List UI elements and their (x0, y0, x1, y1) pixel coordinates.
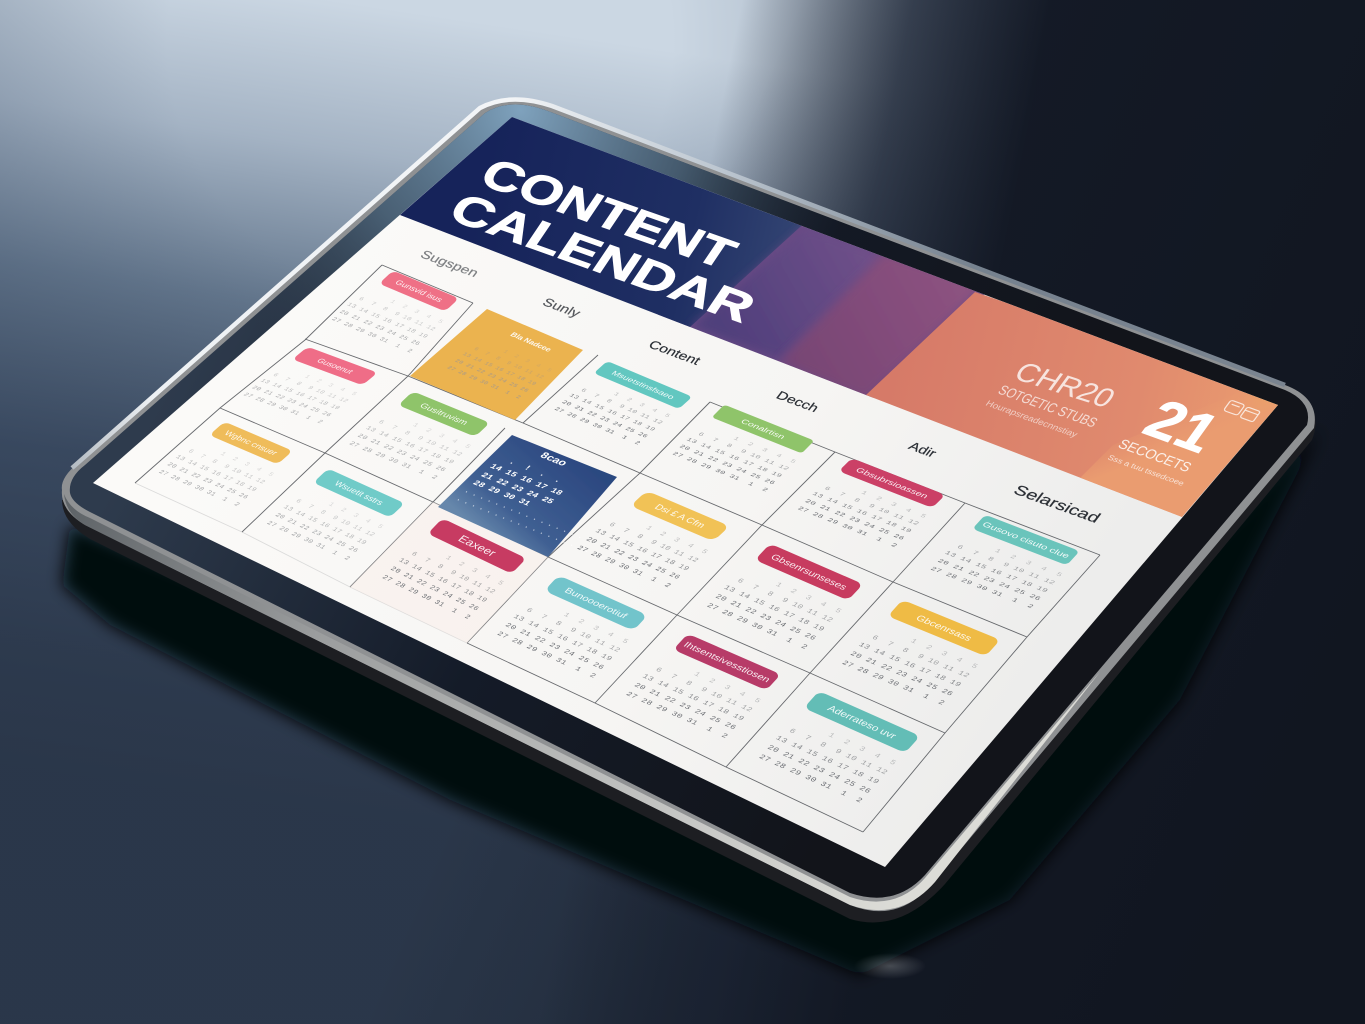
tablet (60, 90, 1320, 922)
date grid: 6 7 8 9 10 11 12 (817, 484, 920, 527)
date grid: 20 21 22 23 24 25 26 (584, 537, 682, 581)
tablet shadow on desk (62, 430, 1320, 979)
date grid: 13 14 15 16 17 18 19 (593, 528, 691, 573)
date grid: 1 2 3 4 5 (657, 656, 762, 705)
date grid: 1 2 3 4 5 (873, 624, 979, 671)
pill: green label: Gusitruvism (418, 401, 470, 427)
tablet bezel (70, 104, 1308, 898)
header light coral panel (1080, 392, 1278, 517)
date grid: 1 2 3 4 5 (583, 379, 672, 419)
pill: crimson label: Gbsubrsioassen (854, 466, 930, 500)
date grid: 6 7 8 9 10 11 12 (405, 549, 497, 596)
date grid: 27 28 29 30 31 1 2 (445, 365, 523, 400)
date grid (455, 454, 658, 563)
date grid: 13 14 15 16 17 18 19 (722, 585, 826, 633)
date grid: 27 28 29 30 31 1 2 (928, 566, 1035, 610)
date grid: 6 7 8 9 10 11 12 (730, 576, 834, 624)
panel: teal cell lower (495, 573, 652, 680)
date grid: 20 21 22 23 24 25 26 (355, 433, 447, 474)
day label 3: Content (646, 337, 704, 367)
date grid: 27 28 29 30 31 1 2 (574, 545, 672, 590)
date grid: 13 14 15 16 17 18 19 (363, 425, 456, 466)
day label 1: Sugspen (418, 247, 482, 279)
title line two: CALENDAR (441, 185, 764, 331)
panel: yellow cell left (157, 419, 298, 508)
bezel highlight (302, 104, 806, 290)
card content (445, 324, 570, 400)
pill: teal label (804, 691, 920, 753)
date grid: 13 14 15 16 17 18 19 (396, 557, 489, 604)
pill: yellow label: Dsi £ A Cfm (652, 503, 707, 530)
date grid: 20 21 22 23 24 25 26 (453, 358, 531, 394)
date grid: 1 2 3 4 5 (476, 338, 554, 373)
date grid: 20 21 22 23 24 25 26 (250, 385, 333, 418)
pill: crimson label (755, 544, 863, 600)
panel: crimson cell centre (705, 542, 866, 651)
day label 6: Selarsicad (1010, 482, 1104, 526)
tablet rim base (62, 98, 1315, 911)
screen body (93, 117, 1278, 867)
date grid: 1 2 3 4 5 (413, 540, 505, 587)
date grid: 13 14 15 16 17 18 19 (174, 454, 258, 493)
pill: yellow label (630, 491, 730, 541)
pill: pink label: Gusoenut (315, 357, 356, 375)
icon: calendar squares (1223, 400, 1261, 422)
card title: 8cao (538, 451, 570, 468)
date grid (380, 540, 505, 621)
pill: teal label: Msuetstinsfsaeo (609, 369, 677, 401)
date grid: 27 28 29 30 31 1 2 (624, 691, 729, 740)
screen (93, 100, 1290, 867)
date grid: 14 15 16 17 18 (487, 462, 565, 497)
date grid: 27 28 29 30 31 1 2 (157, 469, 241, 508)
date grid: 1 2 3 4 5 (825, 477, 928, 520)
date grid (347, 410, 472, 481)
date grid: 20 21 22 23 24 25 26 (273, 512, 360, 554)
date grid: 20 21 22 23 24 25 26 (765, 744, 873, 795)
date grid: 13 14 15 16 17 18 19 (943, 550, 1049, 595)
date grid: 27 28 29 30 31 1 2 (796, 506, 898, 549)
date grid: 6 7 8 9 10 11 12 (602, 520, 700, 564)
card title: Bla Nadcee (508, 331, 554, 354)
date grid: 6 7 8 9 10 11 12 (782, 725, 889, 777)
panel: teal cell right (928, 513, 1083, 610)
pill: crimson label: Gbsenrsunseses (768, 553, 849, 592)
pill: pink label: Gunsvid isus (393, 279, 445, 304)
header band underlay (658, 215, 984, 398)
panel: blue highlight card (438, 435, 672, 563)
card background (410, 309, 583, 420)
date grid: 27 28 29 30 31 1 2 (757, 753, 864, 805)
header purple band (690, 225, 885, 360)
date grid: 13 14 15 16 17 18 19 (640, 674, 746, 723)
pill: green label: Conalrtisn (739, 418, 787, 440)
pill: teal label: Bunoooerotiuf (562, 586, 629, 621)
panel: teal cell top (553, 361, 692, 446)
date grid: 27 28 29 30 31 1 2 (264, 520, 352, 562)
date grid: 27 28 29 30 31 1 2 (670, 451, 769, 494)
date grid: 27 28 29 30 31 1 2 (347, 441, 439, 481)
date grid: 13 14 15 16 17 18 19 (461, 351, 538, 387)
date grid: 27 28 29 30 31 1 2 (330, 316, 414, 354)
pill: green label (398, 391, 490, 437)
date grid: 20 21 22 23 24 25 26 (936, 558, 1042, 602)
date grid: 1 2 3 4 5 (298, 488, 385, 531)
date grid (242, 364, 359, 425)
date grid: 6 7 8 9 10 11 12 (468, 345, 546, 380)
date grid: 1 2 3 4 5 (698, 423, 797, 465)
date grid (928, 535, 1064, 610)
header coral panel (866, 292, 1290, 530)
date grid: 20 21 22 23 24 25 26 (560, 399, 649, 439)
tablet upper rim highlight (72, 99, 1285, 468)
date grid (624, 656, 762, 740)
pill: crimson label (839, 458, 945, 508)
date caption: Sss a tuu tssedcoee (1106, 454, 1186, 488)
date grid: 13 14 15 16 17 18 19 (259, 378, 342, 411)
date grid: 1 2 3 4 5 (611, 511, 709, 556)
pill: yellow label (209, 422, 293, 464)
card background (438, 435, 617, 557)
day labels (418, 247, 1104, 526)
tablet side edge (62, 412, 1316, 922)
pill: teal label (544, 575, 648, 631)
day label 4: Decch (773, 388, 822, 415)
date grid: 6 7 8 9 10 11 12 (182, 447, 267, 485)
date grid (157, 439, 275, 508)
header navy panel (400, 117, 802, 327)
panel: green cell top (670, 404, 816, 494)
panel: pink cell 1 (330, 268, 465, 354)
date grid: 20 21 22 23 24 25 26 (803, 499, 906, 542)
cell tint (350, 502, 548, 643)
panel: orange highlight card (410, 309, 583, 420)
card content (455, 439, 672, 563)
date grid (330, 287, 445, 354)
date grid: 1 2 3 4 5 (380, 410, 472, 450)
pill: yellow label: Wgbnc cnsuer (222, 429, 280, 457)
date grid: 27 28 29 30 31 1 2 (242, 392, 325, 425)
date grid: 27 28 29 30 31 1 2 (553, 406, 642, 446)
pill: teal label: Aderrateso uvr (825, 704, 899, 741)
date grid: 6 7 8 9 10 11 12 (353, 294, 437, 332)
date grid: 6 7 8 9 10 11 12 (289, 496, 376, 539)
date grid: 1 2 3 4 5 (191, 439, 275, 478)
panel: green cell left (347, 389, 495, 481)
header small caption: Hourapsreadecnnstiay (984, 399, 1080, 439)
calendar grid lines (135, 265, 1100, 832)
date grid: 13 14 15 16 17 18 19 (810, 491, 913, 535)
date grid: 20 21 22 23 24 25 26 (677, 444, 776, 486)
header subtitle: SOTGETIC STUBS (995, 383, 1100, 431)
date grid (757, 716, 898, 805)
date grid: 13 14 15 16 17 18 19 (684, 437, 783, 479)
date grid: 1 2 3 4 5 (361, 287, 445, 325)
pill: yellow label (888, 600, 1000, 656)
panel: teal cell bottom (757, 691, 920, 805)
pill: magenta label (673, 634, 781, 690)
panel: yellow cell centre (574, 489, 734, 590)
date grid: 20 21 22 23 24 25 26 (713, 594, 817, 642)
date label: SECOCETS (1115, 437, 1194, 475)
date grid: 20 21 22 23 24 25 26 (338, 309, 422, 347)
date grid: 6 7 8 9 10 11 12 (267, 371, 350, 404)
date grid: 6 7 8 9 10 11 12 (691, 430, 790, 472)
date grid: 1 2 3 4 5 (276, 364, 359, 397)
date grid: 13 14 15 16 17 18 19 (856, 642, 962, 689)
date grid: 13 14 15 16 17 18 19 (511, 614, 613, 663)
pill: crimson label (428, 518, 526, 574)
date grid: 1 2 3 4 5 (790, 716, 898, 767)
pill: teal label (313, 468, 405, 518)
date grid: 13 14 15 16 17 18 19 (774, 735, 881, 786)
date grid (553, 379, 672, 446)
pill: teal label (972, 515, 1080, 565)
calendar cells (157, 268, 1083, 805)
big date number: 21 (1132, 389, 1231, 465)
header code: CHR20 (1008, 357, 1121, 414)
date grid: 6 7 8 9 10 11 12 (648, 665, 754, 714)
date grid: 6 7 8 9 10 11 12 (519, 605, 622, 654)
date grid (796, 477, 928, 549)
date grid: 27 28 29 30 31 1 2 (380, 574, 472, 621)
day label 5: Adir (906, 439, 940, 460)
date grid: . . . . . . . . . . . . . . . . . . . . . (455, 496, 614, 563)
date grid (445, 338, 554, 400)
date grid: 6 7 8 9 10 11 12 (372, 418, 464, 458)
panel: crimson cell left (350, 502, 548, 643)
date grid: 21 22 23 24 25 (478, 471, 556, 506)
pill: magenta label: Ihtsentsivesstiosen (681, 641, 772, 685)
date grid (670, 423, 797, 494)
date grid (495, 597, 630, 680)
pill: crimson label: Eaxeer (455, 533, 499, 559)
header banner (380, 100, 1290, 530)
pill: yellow label: Gbcenrsass (913, 614, 974, 643)
date grid (264, 488, 385, 562)
date grid: 13 14 15 16 17 18 19 (345, 302, 430, 340)
pill: teal label: Gusovo cisuto clue (980, 521, 1071, 560)
date grid: . . . . . . . . . . . . . . . . . . . . . (463, 488, 622, 555)
date grid: 6 7 8 9 10 11 12 (575, 386, 664, 426)
panel: pink cell 2 (242, 345, 381, 425)
date grid: 20 21 22 23 24 25 26 (503, 622, 605, 671)
panel: yellow cell right (840, 599, 1002, 707)
panel: magenta cell lower (624, 632, 784, 740)
header colour bands (380, 100, 1290, 530)
date grid: 1 2 3 4 5 (957, 535, 1064, 579)
date grid: 6 7 8 9 10 11 12 (865, 633, 971, 680)
date grid (705, 567, 843, 651)
pill: green label (712, 405, 814, 453)
day label 2: Sunly (540, 295, 584, 320)
date grid: 27 28 29 30 31 1 2 (705, 603, 809, 651)
tablet lower rim highlight (64, 494, 1100, 910)
panel: teal cell left (264, 467, 407, 562)
date grid (840, 624, 979, 707)
date grid: 20 21 22 23 24 25 26 (848, 651, 954, 698)
title line one: CONTENT (472, 150, 745, 277)
cell content (380, 517, 527, 621)
date grid: . ! . . (496, 454, 564, 485)
date grid: 6 7 8 9 10 11 12 (950, 542, 1056, 587)
header plum band (780, 252, 985, 400)
date grid: 28 29 30 31 (470, 479, 533, 508)
date grid: 13 14 15 16 17 18 19 (568, 393, 657, 432)
date grid: 1 2 3 4 5 (527, 597, 630, 646)
panel: crimson cell top (796, 457, 947, 549)
date grid: 27 28 29 30 31 1 2 (840, 660, 946, 707)
date grid (574, 511, 709, 590)
date grid: 13 14 15 16 17 18 19 (281, 504, 368, 547)
date grid: 20 21 22 23 24 25 26 (632, 682, 737, 732)
date grid: 20 21 22 23 24 25 26 (388, 566, 480, 613)
date grid: 27 28 29 30 31 1 2 (495, 631, 597, 680)
date grid: 20 21 22 23 24 25 26 (165, 462, 250, 500)
pill: teal label: Wsuetit sstrs (332, 479, 386, 507)
date grid: 1 2 3 4 5 (739, 567, 843, 615)
